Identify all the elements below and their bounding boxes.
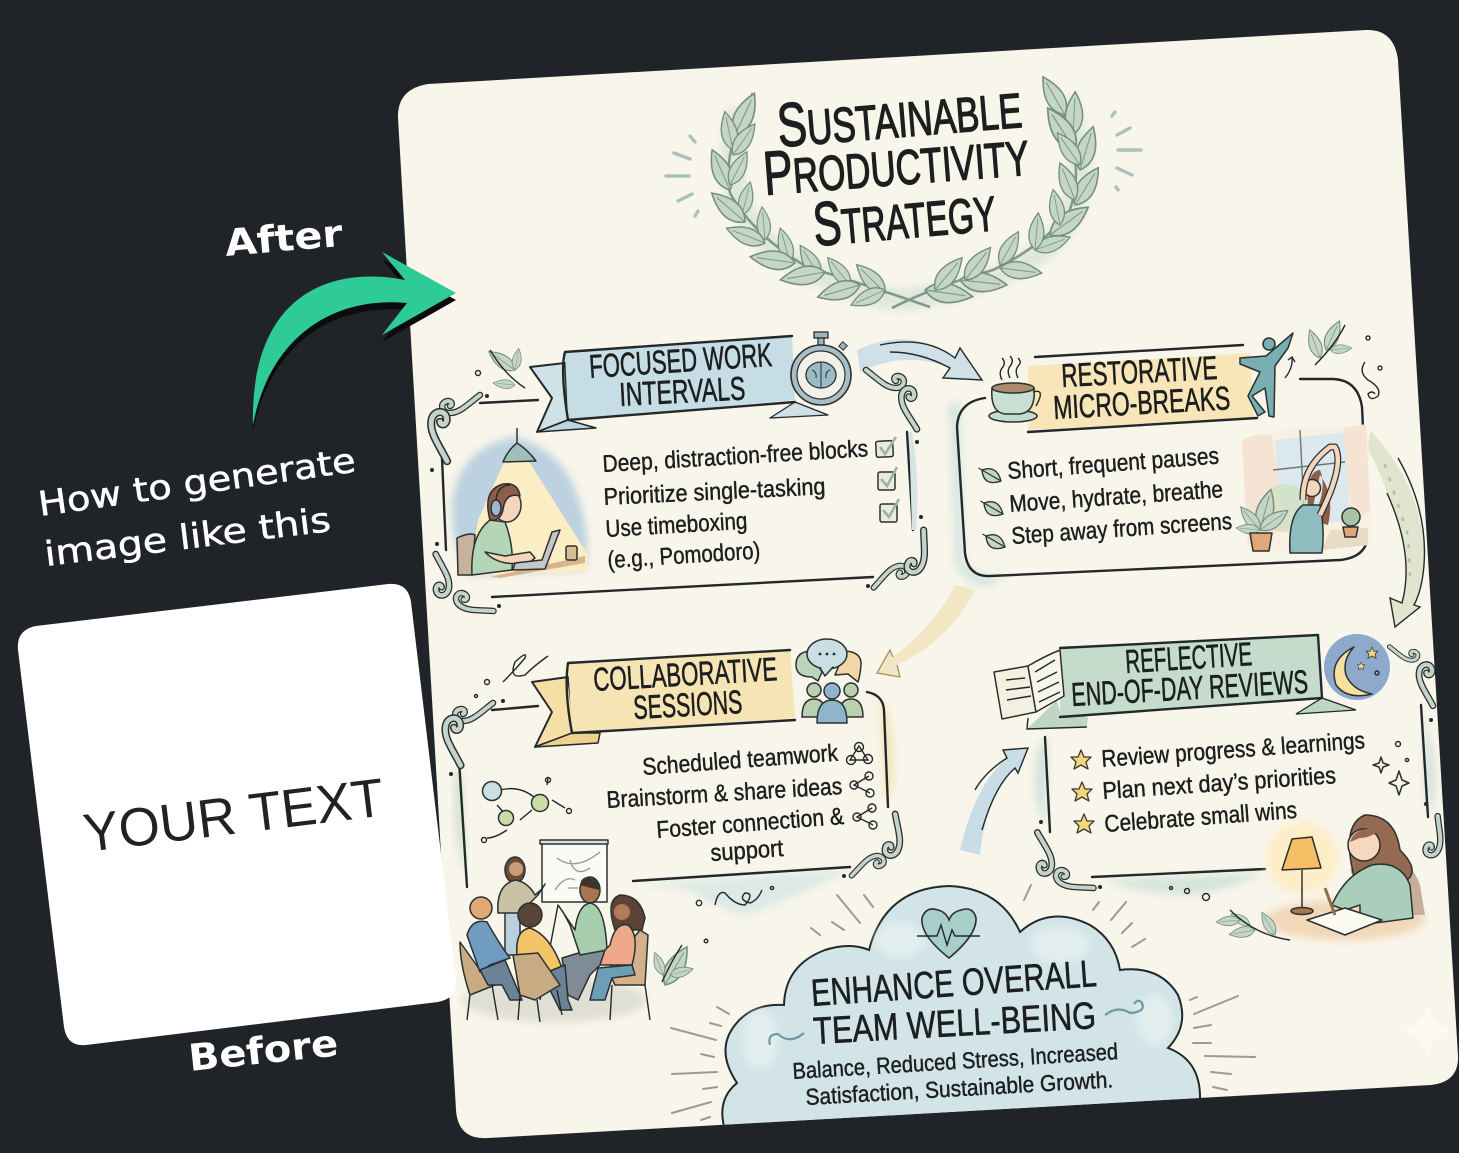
title line 1: SUSTAINABLE <box>774 72 1024 161</box>
icon: heart with pulse <box>917 909 980 958</box>
icon: open book <box>994 650 1064 719</box>
arrow outline: focused work to micro-breaks <box>880 342 982 380</box>
wreath sparkles <box>666 112 1141 216</box>
label: how to generate line 2: image like this <box>42 500 333 575</box>
frame <box>957 379 1368 576</box>
text item 3 line 2: support <box>710 835 785 867</box>
heading: RESTORATIVE <box>1060 349 1218 394</box>
heading line 2: INTERVALS <box>618 369 746 413</box>
checklist text: Deep, distraction-free blocks <box>602 435 869 478</box>
arrow: well-being to reviews <box>960 748 1028 855</box>
heading: REFLECTIVE <box>1124 635 1253 680</box>
illustration: stretching by window <box>1236 424 1372 553</box>
subtext line 1: Balance, Reduced Stress, Increased <box>792 1038 1119 1084</box>
panel: focused work intervals <box>425 332 940 625</box>
subtext line 2: Satisfaction, Sustainable Growth. <box>805 1066 1114 1110</box>
label: before: Before <box>186 1022 340 1080</box>
cloud watercolor patches <box>742 922 1173 1070</box>
person standing <box>498 857 545 955</box>
illustration: team meeting <box>460 840 650 1022</box>
ribbon banner <box>530 336 828 432</box>
icons: check boxes <box>876 437 899 522</box>
bullet text 1: Short, frequent pauses <box>1006 443 1220 485</box>
frame <box>1032 647 1453 902</box>
label: how to generate line 1: How to generate <box>36 441 358 525</box>
right leaves <box>924 72 1106 306</box>
bullet text 2: Plan next day’s priorities <box>1102 762 1337 805</box>
banner <box>1028 345 1257 432</box>
panel: restorative micro-breaks <box>948 318 1382 587</box>
icon: chat bubbles <box>796 639 861 682</box>
bullet text 1: Review progress & learnings <box>1100 727 1366 773</box>
text item 2: Brainstorm & share ideas <box>606 773 843 814</box>
checklist item 3 line 2: (e.g., Pomodoro) <box>607 537 761 574</box>
person right green <box>558 877 610 1000</box>
arrow: focused work to micro-breaks <box>857 339 982 380</box>
icon: network nodes <box>482 778 572 842</box>
small leaf sprig <box>1308 320 1352 366</box>
watermark sparkle <box>1402 1002 1452 1058</box>
headline line 1: ENHANCE OVERALL <box>810 953 1098 1015</box>
panel: collaborative sessions <box>439 639 912 1022</box>
panel: after infographic card <box>390 20 1459 1145</box>
bullet text 3: Step away from screens <box>1011 508 1233 550</box>
icon: moon and stars <box>1324 634 1390 700</box>
radiating lines <box>671 885 1255 1120</box>
squiggle doodle <box>696 886 774 943</box>
title line 2: PRODUCTIVITY <box>761 120 1031 209</box>
frame <box>439 680 912 915</box>
heading: FOCUSED WORK <box>588 336 773 385</box>
panel: reflective end-of-day reviews <box>994 634 1453 940</box>
person left seated <box>460 897 522 1020</box>
person centre yellow with chair <box>513 903 572 1022</box>
checklist item 2: Prioritize single-tasking <box>603 473 826 511</box>
bullet text 3: Celebrate small wins <box>1103 797 1298 838</box>
icons: share nodes <box>846 742 877 829</box>
person right pink <box>590 895 650 1020</box>
ribbon banner <box>532 650 795 747</box>
leaf doodle <box>650 942 695 989</box>
squiggles <box>503 655 548 682</box>
heading line 2: END-OF-DAY REVIEWS <box>1070 663 1309 713</box>
illustration: person at laptop <box>452 428 588 578</box>
arrow: green <box>253 252 456 432</box>
wreath stems <box>728 77 1076 308</box>
headline line 2: TEAM WELL-BEING <box>812 995 1097 1053</box>
card paper <box>390 20 1459 1145</box>
arrow: micro-breaks to reviews <box>1368 430 1424 627</box>
wash <box>948 400 1010 587</box>
small leaf sprig <box>485 346 525 389</box>
frame <box>425 370 940 625</box>
icon: stretching figure <box>1240 333 1295 417</box>
icon: coffee cup <box>989 356 1040 422</box>
checklist item 3: Use timeboxing <box>605 508 748 543</box>
left leaves <box>704 89 891 312</box>
cloud <box>722 886 1200 1130</box>
title wreath <box>666 72 1141 312</box>
flip chart <box>540 840 608 1000</box>
leaf sprig <box>1216 910 1290 940</box>
wreath wash <box>732 100 1079 300</box>
label: after: After <box>223 212 345 265</box>
squiggles <box>769 1001 1143 1045</box>
icon: team people <box>802 683 863 723</box>
illustration: journaling at lamp <box>1265 815 1425 940</box>
ribbon banner <box>1027 635 1356 729</box>
sparkles <box>1373 742 1409 795</box>
heading line 2: SESSIONS <box>632 683 743 726</box>
panel: before white card <box>18 584 456 1045</box>
heading line 2: MICRO-BREAKS <box>1052 379 1231 426</box>
bullet icons: stars <box>1071 750 1094 833</box>
title <box>764 92 1028 246</box>
your text: YOUR TEXT <box>80 768 387 864</box>
title line 3: STRATEGY <box>810 175 999 260</box>
panel: enhance overall team well-being cloud <box>671 885 1255 1130</box>
arrow: micro-breaks to collaborative <box>877 585 975 677</box>
white card <box>18 584 456 1045</box>
bullet icons: leaves <box>975 463 1008 553</box>
text item 1: Scheduled teamwork <box>641 740 840 781</box>
bullet text 2: Move, hydrate, breathe <box>1009 476 1224 518</box>
heading: COLLABORATIVE <box>592 650 778 698</box>
text item 3: Foster connection & <box>655 803 845 844</box>
squiggle <box>1362 336 1382 399</box>
icon: stopwatch with brain <box>791 332 851 405</box>
